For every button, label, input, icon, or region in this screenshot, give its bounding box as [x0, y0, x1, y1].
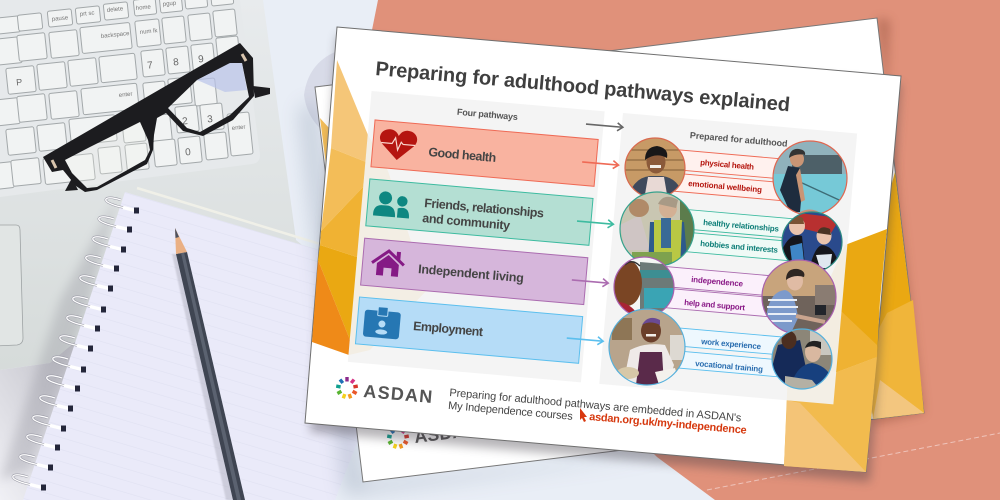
strip text: healthy relationships: healthy relationships [703, 218, 780, 234]
icon: people [373, 190, 411, 219]
notebook page rim [137, 188, 320, 244]
keyboard legends: pause [52, 15, 69, 23]
trackpad [0, 225, 23, 346]
keyboard legends: 0 [185, 147, 192, 158]
icon: heart [378, 128, 418, 162]
keyboard legends: delete [107, 6, 124, 14]
keyboard legends: 3 [207, 114, 214, 125]
label: independent living: Independent living [418, 262, 524, 285]
rear document shadow on salmon [873, 18, 924, 425]
rear document mid facet [865, 300, 924, 419]
rear document logotype: ASDAN [413, 419, 479, 447]
notebook [0, 188, 420, 500]
panel: prepared for adulthood [599, 113, 857, 404]
strip text: work experience: work experience [700, 337, 762, 351]
strips: employment [649, 326, 782, 377]
main document [305, 27, 901, 472]
photo: two men using a tablet [770, 328, 836, 392]
icon: cursor [580, 408, 587, 422]
keyboard legends: 9 [198, 54, 205, 65]
keyboard legends: home [136, 4, 152, 12]
keyboard legends: prt sc [80, 10, 95, 18]
strips: independent living [649, 265, 777, 317]
keyboard well [0, 0, 260, 197]
strip text: hobbies and interests: hobbies and interests [700, 239, 779, 255]
footer text line 2: My Independence courses [448, 400, 574, 423]
logo mark [336, 377, 358, 398]
rear document light facet [873, 380, 924, 419]
photo: two young swimmers waving [781, 211, 843, 270]
glasses [43, 43, 270, 192]
photo: two people gardening in hi-vis [619, 191, 695, 266]
strips: friends [664, 208, 797, 261]
keyboard legends: enter [232, 125, 246, 132]
hinge rivets [52, 54, 246, 168]
strip text: physical health: physical health [700, 158, 755, 172]
rear document [315, 18, 924, 482]
spiral binding [13, 198, 139, 490]
band: good health [371, 120, 598, 186]
keyboard legends: 2 [182, 116, 189, 127]
arrow: employment [566, 334, 603, 345]
title: Preparing for adulthood pathways explained [375, 58, 791, 116]
strip text: help and support: help and support [684, 298, 746, 312]
arrow: friends [577, 217, 614, 228]
strip text: vocational training: vocational training [695, 359, 763, 374]
dashed fold line [707, 433, 1000, 490]
footer text line 1: Preparing for adulthood pathways are embedded in ASDAN's [449, 387, 742, 425]
strip text: independence: independence [691, 275, 744, 289]
strips: good health [664, 149, 792, 201]
pencil [172, 228, 245, 500]
label: employment: Employment [413, 319, 484, 339]
photo: woman seen from behind [613, 256, 675, 314]
heading: prepared for adulthood: Prepared for adulthood [689, 130, 788, 149]
photo: swimmer at pool [772, 140, 848, 214]
label: friends line 1: Friends, relationships [424, 196, 545, 220]
keyboard keys [0, 0, 253, 190]
rear document yellow corner [860, 172, 924, 419]
photo: boy cooking in kitchen [761, 259, 837, 332]
sheet [305, 27, 901, 472]
label: friends line 2: and community [422, 211, 511, 233]
arrow: independent living [571, 276, 609, 287]
under-notebook shadow area [0, 300, 125, 500]
heading: four pathways: Four pathways [457, 107, 518, 122]
left lens tint [65, 122, 150, 188]
keyboard legends [16, 1, 246, 158]
rear document shadow [300, 100, 700, 495]
icon: house [371, 250, 405, 277]
notebook shadow [0, 195, 118, 480]
keyboard legends: pgup [163, 1, 177, 8]
strip text: emotional wellbeing: emotional wellbeing [688, 179, 762, 194]
keyboard legends: P [16, 77, 23, 87]
panel: four pathways [348, 91, 605, 382]
footer link: asdan.org.uk/my-independence [589, 411, 747, 437]
keyboard legends: 8 [173, 57, 180, 68]
arrow: header [586, 120, 623, 131]
band: friends [366, 179, 593, 245]
main document shadow [310, 35, 901, 482]
footer logotype: ASDAN [363, 381, 433, 407]
band: independent living [361, 238, 588, 305]
arrow: good health [582, 158, 619, 169]
keyboard legends: enter [119, 92, 133, 99]
bottom right yellow facets [784, 229, 887, 472]
rear document left facet [320, 118, 329, 165]
band: employment [355, 297, 583, 363]
label: good health: Good health [428, 145, 497, 165]
keyboard legends: backspace [101, 31, 130, 40]
right lens reflection [197, 63, 247, 92]
laptop [0, 0, 320, 370]
keyboard legends: 7 [147, 60, 154, 72]
photo: woman in apron baking [608, 308, 686, 388]
photo: smiling young man [624, 137, 686, 195]
notebook page [23, 192, 420, 500]
local sheet layout [344, 58, 860, 445]
computer mouse [304, 52, 340, 135]
icon: id badge [363, 305, 401, 340]
rear document logo [387, 430, 409, 448]
left yellow facets [312, 60, 427, 355]
keyboard legends: num lk [140, 28, 159, 36]
salmon paper background [372, 0, 1000, 500]
